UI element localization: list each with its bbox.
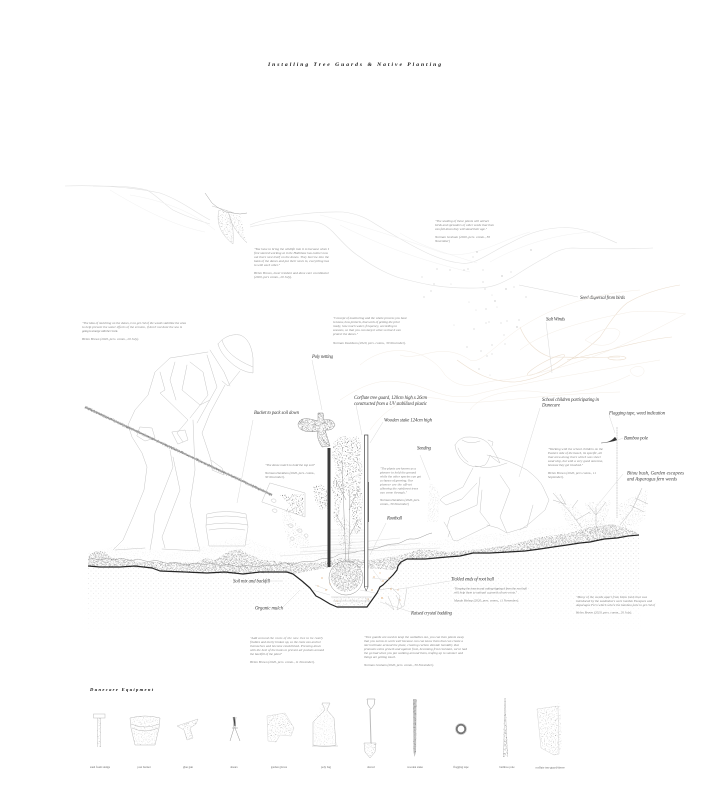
quote: school children: Eastern side of the beach, its specific, all (547, 451, 602, 456)
quote: tree guards (363, 635, 467, 668)
tree guard foliage and trunk (313, 435, 366, 566)
quote: mulching: "The idea of mulching on the dunes, is to get rid of the weeds stabilize the area (82, 321, 186, 326)
quote: tickling: will help them to unleash a growth of new roots." (454, 590, 518, 594)
equipment: corflute guard (535, 703, 565, 770)
corflute tree guard edge (364, 435, 368, 591)
quote: wildlife: (2020, pers comm., 20 July). (254, 275, 292, 280)
label: poly netting: Poly netting (311, 355, 334, 360)
quote: weeds apart from bitou: Asparagus Fern which where the bamboo pole to get rid of (575, 603, 656, 607)
quote: tree guards: Norman Graham (2020, pers. comm., 30 November). (363, 663, 434, 668)
label: rootball: Rootball (386, 516, 403, 522)
label: raised crystal budding (380, 602, 453, 616)
label: corflute tree guard: Corflute tree guard, 120cm high x 26cm (354, 396, 428, 401)
label: organic mulch: Organic mulch (255, 606, 284, 612)
equipment: poly bag (312, 703, 338, 769)
quote: wildlife: out there nest itself on the dunes. They burrow into the (254, 255, 330, 259)
label: bamboo pole: Bamboo pole (624, 436, 649, 442)
rootball (329, 560, 363, 595)
quote: weeds apart from bitou: introduced by the sandminers were Garden Escapees and (576, 599, 652, 603)
label: school children: Dunecare (541, 404, 561, 408)
equipment: gloves: garden gloves (271, 765, 288, 769)
label: flagging tape: Flagging tape, weed indication (608, 412, 666, 416)
equipment: shears (230, 717, 240, 769)
label: weeds (596, 472, 684, 507)
quote: monitoring: seasons, so that you can keep it alive so that it can (333, 328, 401, 333)
quote: pioneer plants: a chance of growing. Our (380, 478, 414, 482)
quote: wildlife: first started working at it the Hubbleas has extinct now (254, 251, 329, 255)
quote: pioneer plants: comm., 30 November) (380, 502, 409, 507)
quote: seeding attracts birds: "The seeding of these plants will attract (435, 219, 489, 223)
organic mulch layer in hole (331, 597, 372, 606)
quote: seeding attracts birds (434, 219, 494, 243)
quote: tree guards: the go bad when you put walking around them, leafing up to summer and (364, 651, 463, 656)
faint background vegetation along the dune (88, 515, 639, 572)
quote: backfilling (249, 636, 324, 665)
quote: dense mulch: "The dense mulch to hold the top soil" (265, 463, 316, 467)
quote: monitoring: protect the dunes." (332, 332, 359, 336)
quote: backfilling: themselves and become established. Pressing down (250, 644, 321, 648)
quote: pioneer plants (379, 466, 421, 507)
quote: pioneer plants: allowing the rainforest trees (380, 486, 419, 490)
quote: backfilling: friables and nicely broken up, so the roots can anchor (250, 640, 322, 645)
label: soil mix: Soil mix and backfill (233, 580, 271, 584)
ground line and planting hole (88, 535, 639, 607)
equipment: shovel (364, 699, 376, 769)
label: salt winds (546, 318, 565, 373)
quote: backfilling: Helen Brown (2020, pers. comm., 11 November). (249, 660, 315, 665)
quote: backfilling: the backfill of the plant" (250, 652, 283, 656)
equipment: shovel: shovel (367, 765, 375, 769)
quote: wildlife: to with each other." (254, 263, 281, 267)
label: tickled root ball: Tickled ends of root ball (451, 578, 495, 582)
label: seed dispersal: Seed dispersal from birds (580, 296, 625, 301)
quote: mulching (81, 321, 186, 342)
quote: pioneer plants: can come through." (380, 490, 408, 494)
label: flagging tape (608, 412, 666, 433)
heading: equipment: Dunecare Equipment (89, 687, 154, 692)
quote: school children: that area along there which was sheer (548, 455, 602, 459)
icon: shovel with soil (85, 407, 312, 548)
quote: school children: sand slop, but with a very good outcome, (548, 459, 603, 464)
quote: weeds apart from bitou: Helen Brown (2020, pers. comm., 20 July). (575, 610, 632, 616)
quote: monitoring: to know, how protects, that work of getting the prior (333, 320, 401, 325)
quote: school children: "Working with the school children on the (548, 447, 604, 451)
title: Installing Tree Guards & Native Planting (267, 62, 441, 68)
quote: dense mulch: 30 November). (265, 475, 285, 479)
equipment: wooden stake: wooden stake (407, 765, 424, 769)
quote: school children: Helen Brown (2020, pers comm., 11 (547, 471, 596, 476)
quote: weeds apart from bitou: "Many of the weeds apart from bitou bush that was (576, 595, 648, 599)
label: school children: School children participating in (542, 398, 600, 403)
quote: tree guards: that you seems to work well because can can know them that can create a (364, 639, 463, 643)
quote: tree guards: things are getting touch. (364, 655, 396, 659)
quote: dense mulch (264, 463, 316, 479)
quote: seeding attracts birds: November) (434, 239, 450, 243)
label: raised crystal budding: Raised crystal budding (410, 612, 453, 616)
quote: seeding attracts birds: birds and spreaders of other seeds that then (435, 223, 494, 227)
quote: backfilling: "Add around the roots of the new tree to be really (250, 636, 324, 640)
label: wooden stake: Wooden stake 124cm high (384, 418, 433, 424)
quote: tickling: Maude Bishop (2020, pers. comm., 11 November). (453, 598, 519, 604)
label: seeding (417, 446, 432, 480)
label: salt winds: Salt Winds (546, 318, 565, 322)
icon: bird in flight (205, 193, 247, 244)
quote: tree guards: "Tree guards are used to keep the wallabies out, you can then plants away (364, 635, 465, 640)
figure: adult volunteer with shovel (113, 335, 253, 551)
label: organic mulch (255, 590, 300, 612)
quote: tree guards: microclimate around the plant, creating carbon dioxide humidity that (364, 643, 459, 648)
quote: monitoring: "Concept of monitoring and the whole process you have (333, 316, 408, 320)
quote: pioneer plants: pioneer to hold the ground (379, 470, 416, 474)
quote: pioneer plants: while the other species can get (380, 474, 421, 478)
label: weeds: Bitou bush, Garden escapees (627, 472, 684, 476)
quote: monitoring (332, 316, 408, 346)
label: poly netting (311, 355, 334, 410)
quote: pioneer plants: pioneer are the off-set (379, 482, 412, 486)
equipment: glue gun (177, 719, 198, 769)
label: rootball (370, 516, 403, 555)
tickled roots and raised crystal specks (312, 570, 407, 610)
equipment: hammer (90, 714, 111, 769)
wind lines: upper grey currents (65, 186, 653, 288)
icon: poly netting tied to stake (298, 413, 335, 447)
equipment: flagging tape: flagging tape (453, 765, 469, 769)
label: school children (519, 398, 600, 477)
quote: wildlife (253, 247, 330, 280)
quote: tickling (453, 586, 527, 604)
salt winds: tan swirling lines (340, 285, 686, 430)
label: bucket (237, 411, 300, 503)
equipment: bucket: post bucket (137, 765, 151, 769)
equipment: bucket (130, 716, 160, 769)
quote: monitoring: Norman Davidson (2020, pers. comm., 30 November). (332, 341, 406, 346)
seeds falling from child's hand (427, 482, 440, 522)
equipment: wooden stake (407, 699, 424, 769)
equipment: gloves (267, 713, 294, 769)
quote: backfilling: with the heel of the boots to prevent air pockets around (250, 648, 324, 652)
quote: school children: because they get involved." (548, 463, 584, 467)
label: tickled root ball (393, 578, 495, 590)
label: bucket: Bucket to pack soil down (254, 411, 300, 416)
equipment: flagging tape (453, 723, 469, 769)
quote: weeds apart from bitou (575, 595, 656, 616)
label: seed dispersal (519, 285, 625, 301)
stippled sand under ground (88, 536, 639, 614)
quote: dense mulch: Norman Davidson (2020, pers. comm., (264, 471, 315, 476)
quote: mulching: going to emerge with the Creek. (82, 329, 118, 333)
quote: mulching: Helen Brown (2020, pers. comm., 20 July). (81, 337, 139, 342)
wooden stake: dark (328, 448, 330, 567)
quote: wildlife: bank of the dunes and put their nests in, everything has (254, 259, 330, 264)
dense ground cover vegetation (88, 524, 639, 574)
label: corflute tree guard (354, 396, 428, 435)
quote: wildlife: "You have to bring the wildlife into it to because when I (254, 247, 330, 251)
quote: mulching: to help prevent the water effects of the erosion, if don't not dont the sea is (82, 325, 183, 330)
quote: school children: September). (548, 475, 564, 479)
equipment: glue gun: glue gun (183, 765, 194, 769)
quote: pioneer plants: "The plants are known as a (380, 466, 416, 470)
seeds dispersed by birds (422, 250, 531, 375)
quote: pioneer plants: Norman Davidson (2020, pers. (379, 498, 420, 503)
quote: tickling: "Keeping the insects and cutting/ripping it from the root ball (454, 586, 527, 590)
icon: bamboo pole with flagging tape (601, 427, 617, 518)
quote: tree guards: promotes extra growth and against frost, becoming frost resistant, we've had (363, 647, 467, 652)
equipment: shears: shears (230, 765, 238, 769)
label: corflute tree guard: constructed from a UV stabilized plastic (354, 402, 428, 407)
label: wooden stake (370, 418, 433, 443)
equipment: bamboo poles: bamboo pole (499, 765, 515, 769)
quote: seeding attracts birds: can fall down they will stand their age." (435, 227, 488, 231)
label: weeds: and Asparagus fern weeds (627, 478, 677, 482)
quote: wildlife: Helen Brown, local resident and dune care coordinator (253, 271, 330, 276)
weed sprigs (553, 488, 648, 530)
label: seeding: Seeding (417, 446, 432, 452)
quote: monitoring: ready, how much water, frequency, according to (333, 324, 397, 329)
equipment: corflute guard: corflute tree guard/sleeve (535, 766, 565, 770)
equipment: hammer: sand foam sledge (90, 765, 111, 769)
icon: bucket (206, 512, 248, 546)
quote: seeding attracts birds: Norman Graham (2020, pers. comm., 30 (434, 235, 490, 240)
figure: school child seeding (440, 437, 549, 541)
equipment: bamboo poles (499, 698, 515, 769)
equipment: poly bag: poly bag (321, 765, 332, 769)
quote: school children (547, 447, 604, 479)
